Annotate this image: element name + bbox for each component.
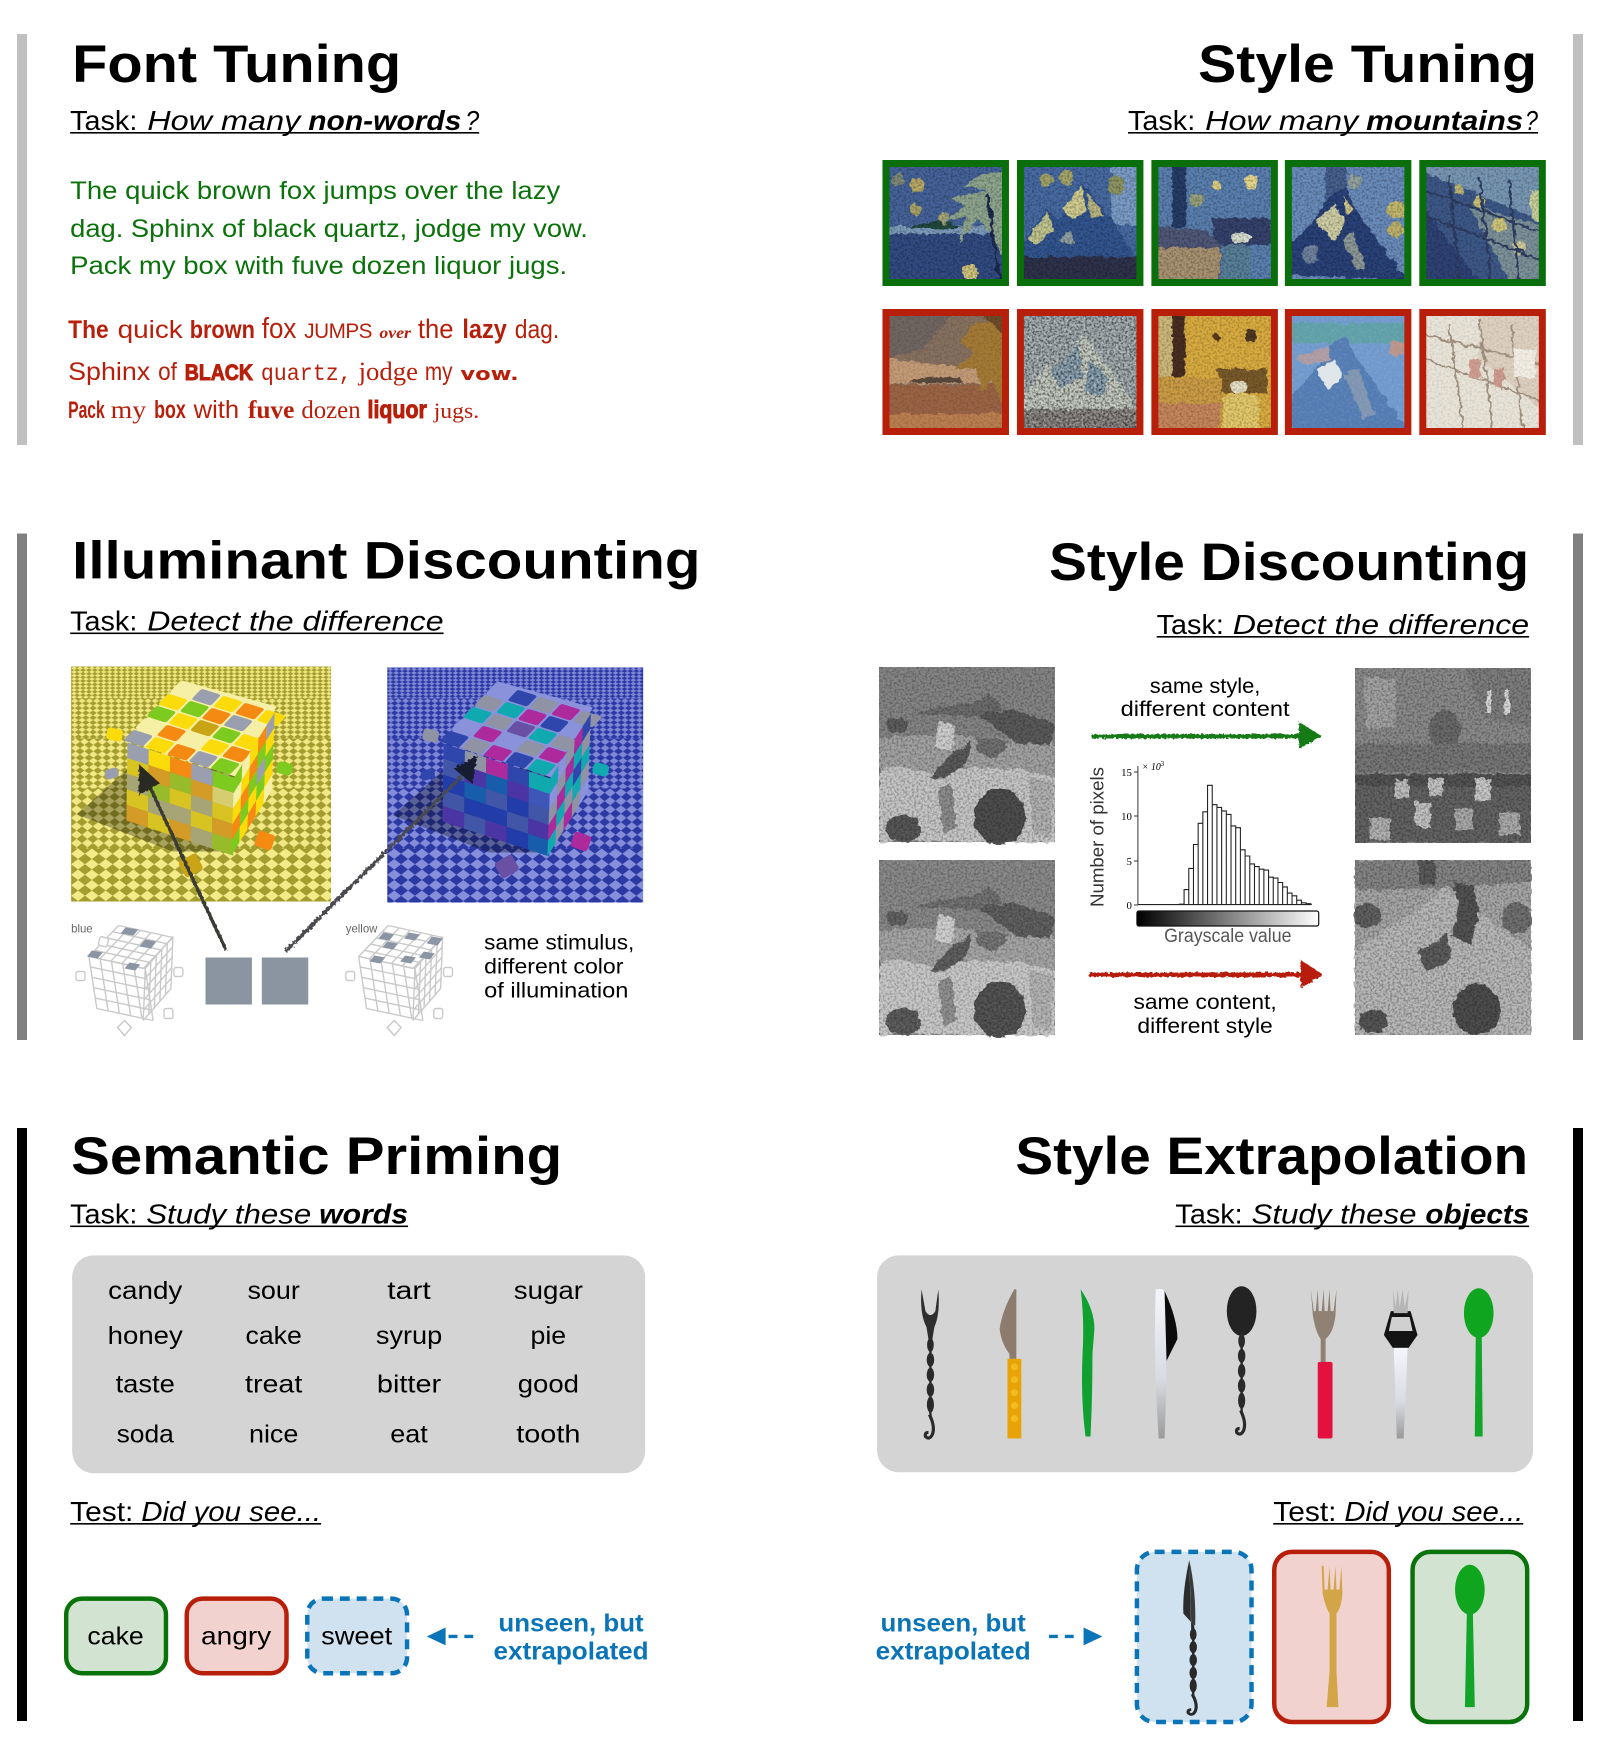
task line [70, 1198, 408, 1230]
axis and ticks: 3 [1161, 760, 1165, 768]
caption: same content [1133, 990, 1277, 1038]
task line [70, 605, 444, 637]
panel content [68, 35, 588, 424]
label: unseen, but extrapolated: unseen, but [881, 1610, 1026, 1637]
panel: Semantic Priming [17, 1127, 649, 1721]
green correctly-fonted text [70, 178, 588, 280]
panel: Style Discounting [879, 533, 1583, 1040]
image: gray mountain, repeat [879, 860, 1055, 1038]
study word panel: sugar [514, 1278, 583, 1305]
dashed arrow pointing right [1049, 1627, 1102, 1645]
caption: same style: same style, [1150, 674, 1260, 698]
caption: same style: different content [1121, 697, 1290, 721]
caption: same style [1121, 674, 1290, 721]
test word: cake [66, 1599, 166, 1673]
image: sunset palm beach [886, 312, 1005, 432]
red mixed-font text: my [111, 397, 147, 424]
task line: How many [147, 105, 303, 136]
task line: Task: [70, 105, 137, 136]
wireframe cube: yellow: yellow [346, 923, 378, 936]
red mixed-font text: Pack [68, 397, 105, 424]
panel content [66, 1127, 649, 1673]
image: speckled mountain [1020, 312, 1140, 432]
study word panel: bitter [377, 1372, 441, 1399]
task line: ? [465, 105, 480, 136]
test line: Test: [70, 1496, 133, 1527]
green correctly-fonted text: The quick brown fox jumps over the lazy [70, 178, 561, 205]
red mixed-font text: of [158, 359, 177, 386]
icon: black twisted spoon [1227, 1286, 1256, 1434]
task line: Task: [70, 1198, 137, 1230]
red mixed-font text: fox [262, 313, 297, 345]
image: starry bedroom [1155, 164, 1274, 282]
red mixed-font text: dozen [301, 397, 361, 424]
task line: objects [1425, 1198, 1529, 1230]
dashed arrow pointing left [427, 1627, 480, 1645]
task line [1128, 105, 1538, 136]
panel content [876, 1127, 1533, 1722]
heading and task [1128, 35, 1538, 136]
red mixed-font text: BLACK [185, 360, 253, 385]
study word panel: honey [108, 1323, 183, 1350]
arrow to blue-lit tile [286, 756, 477, 952]
caption: same stimulus: of illumination [484, 978, 628, 1003]
histogram [1087, 760, 1319, 947]
icon: green spoon [1464, 1288, 1494, 1436]
test line: Did you see... [1344, 1496, 1523, 1527]
caption: same content: same content, [1133, 990, 1277, 1014]
red mixed-font text: box [154, 397, 186, 424]
panel: Style Tuning [886, 34, 1583, 445]
axis and ticks: 15 [1121, 767, 1133, 779]
wireframe cube: blue: blue [71, 923, 93, 936]
accent bar [1573, 1128, 1583, 1721]
accent bar [17, 34, 27, 445]
panel content [0, 531, 700, 1036]
accent bar [17, 534, 27, 1040]
test word: angry: angry [201, 1623, 272, 1650]
label: unseen, but extrapolated [494, 1610, 649, 1665]
heading: Illuminant Discounting: Illuminant Discounting [72, 531, 700, 591]
icon: silver and black knife [1155, 1289, 1177, 1438]
caption: same stimulus: same stimulus, [484, 930, 634, 955]
study word panel: tooth [516, 1421, 580, 1448]
image: starry palm beach [886, 164, 1005, 282]
study word panel: tart [387, 1278, 431, 1305]
heading: Style Discounting: Style Discounting [1049, 533, 1529, 592]
wireframe cube: blue [0, 923, 183, 1036]
task line: Detect the difference [147, 605, 444, 637]
caption: same stimulus: different color [484, 954, 623, 979]
icon: knife with yellow handle [1000, 1289, 1021, 1438]
study word panel: pie [531, 1323, 566, 1350]
image grid [886, 164, 1542, 432]
wireframe cube: yellow [98, 923, 453, 1036]
axis and ticks: 5 [1127, 856, 1132, 868]
label: unseen, but extrapolated [876, 1610, 1031, 1665]
task line: Study these [1252, 1198, 1417, 1230]
image: golden bedroom [1155, 312, 1274, 432]
gray tile pair [206, 958, 308, 1004]
panel: Style Extrapolation [876, 1127, 1583, 1722]
green correctly-fonted text: Pack my box with fuve dozen liquor jugs. [70, 253, 567, 280]
study word panel: good [518, 1372, 579, 1399]
task line: Detect the difference [1233, 609, 1529, 640]
task line: Task: [70, 605, 137, 637]
red mixed-font text: my [425, 359, 453, 386]
accent bar [17, 1128, 27, 1721]
task line: ? [1525, 105, 1538, 136]
red mixed-font text: The [68, 317, 109, 344]
task line: Study these [146, 1198, 311, 1230]
bars [1138, 785, 1312, 905]
study word panel: candy [108, 1278, 183, 1305]
axis and ticks: 0 [1127, 900, 1132, 912]
study object panel [877, 1255, 1533, 1472]
image: gray mountain, different style [1353, 860, 1532, 1035]
heading: Style Extrapolation: Style Extrapolation [1015, 1127, 1528, 1186]
panel: Illuminant Discounting [0, 531, 700, 1040]
icon: fork with red handle [1311, 1289, 1336, 1438]
icon: geometric silver fork [1384, 1289, 1418, 1438]
axis and ticks: × 10 [1142, 762, 1161, 773]
red mixed-font text: brown [190, 317, 255, 344]
image: starry shelves [1423, 164, 1542, 282]
accent bar [1573, 534, 1583, 1040]
task line: mountains [1366, 105, 1523, 136]
image: starry mountain [1020, 164, 1140, 282]
red mixed-font text: with [193, 397, 239, 424]
task line [70, 105, 480, 136]
label: unseen, but extrapolated: extrapolated [876, 1638, 1031, 1665]
grayscale color bar [1137, 911, 1319, 926]
task line [1175, 1198, 1529, 1230]
red mixed-font text: the [418, 314, 453, 344]
test word: sweet [307, 1599, 407, 1673]
test word: sweet: sweet [321, 1623, 392, 1650]
caption: same content: different style [1137, 1014, 1273, 1038]
red mixed-font text: Sphinx [68, 359, 151, 386]
icon: green knife [1081, 1289, 1094, 1436]
arrow: green [1091, 722, 1322, 749]
image: pale shelves [1423, 312, 1542, 432]
task line: Task: [1175, 1198, 1243, 1230]
axis and ticks: 10 [1121, 811, 1133, 823]
task line: How many [1205, 105, 1361, 136]
image: cube under blue light [387, 668, 643, 902]
study word panel: taste [116, 1372, 175, 1399]
study word panel: soda [117, 1421, 174, 1448]
test object: green spoon [1413, 1552, 1527, 1722]
label: unseen, but extrapolated: unseen, but [498, 1610, 644, 1637]
heading: Semantic Priming: Semantic Priming [71, 1127, 562, 1186]
test line [70, 1496, 321, 1527]
red mixed-font text: dag. [515, 316, 559, 344]
accent bar [1573, 34, 1583, 445]
arrow: red [1089, 960, 1323, 988]
red mixed-font text: JUMPS [304, 320, 372, 343]
test object: gold fork [1274, 1552, 1389, 1722]
red mixed-font text: liquor [368, 397, 427, 424]
red mixed-font text: quick [118, 317, 183, 344]
y axis label: Number of pixels [1087, 767, 1108, 907]
heading: Style Tuning: Style Tuning [1198, 35, 1537, 94]
study word panel: syrup [376, 1323, 442, 1350]
task line: words [319, 1198, 408, 1230]
image: blue pastel mountain [1288, 312, 1408, 432]
red mixed-font text: jodge [358, 357, 418, 386]
x axis label: Grayscale value [1164, 926, 1292, 947]
study word panel [72, 1255, 645, 1473]
label: unseen, but extrapolated: extrapolated [494, 1638, 649, 1665]
test object: unseen dark knife [1137, 1552, 1252, 1722]
test word: cake: cake [87, 1623, 144, 1650]
arrow to yellow-lit tile [138, 764, 226, 950]
red mixed-font text: vow. [460, 364, 519, 385]
image: cube under yellow light [71, 666, 331, 902]
red mixed-font text: fuve [248, 397, 294, 424]
study word panel: nice [249, 1421, 298, 1448]
icon: black twisted fork [921, 1289, 939, 1438]
test line: Did you see... [141, 1496, 321, 1527]
study word panel: sour [247, 1278, 300, 1305]
image: gray shop, same style [1355, 668, 1531, 843]
red mixed-font text [68, 313, 559, 424]
heading: Font Tuning: Font Tuning [72, 35, 401, 94]
task line: Task: [1157, 609, 1224, 640]
study word panel: treat [245, 1372, 302, 1399]
test word: angry [187, 1599, 287, 1673]
caption: same stimulus [484, 930, 634, 1003]
test line [1273, 1496, 1523, 1527]
panel content [1049, 533, 1529, 1038]
red mixed-font text: lazy [462, 314, 507, 344]
study word panel: eat [390, 1421, 428, 1448]
image: gray mountain, reference [879, 667, 1055, 845]
green correctly-fonted text: dag. Sphinx of black quartz, jodge my vow. [70, 216, 588, 243]
axis and ticks [1121, 760, 1165, 912]
task line [1157, 609, 1529, 640]
task line: Task: [1128, 105, 1195, 136]
image: starry climber mountain [1288, 164, 1408, 282]
red mixed-font text: over [379, 325, 412, 342]
panel: Font Tuning [17, 34, 588, 445]
test line: Test: [1273, 1496, 1336, 1527]
red mixed-font text: quartz, [261, 361, 352, 387]
study word panel: cake [246, 1323, 302, 1350]
task line: non-words [308, 105, 461, 136]
red mixed-font text: jugs. [433, 399, 479, 423]
